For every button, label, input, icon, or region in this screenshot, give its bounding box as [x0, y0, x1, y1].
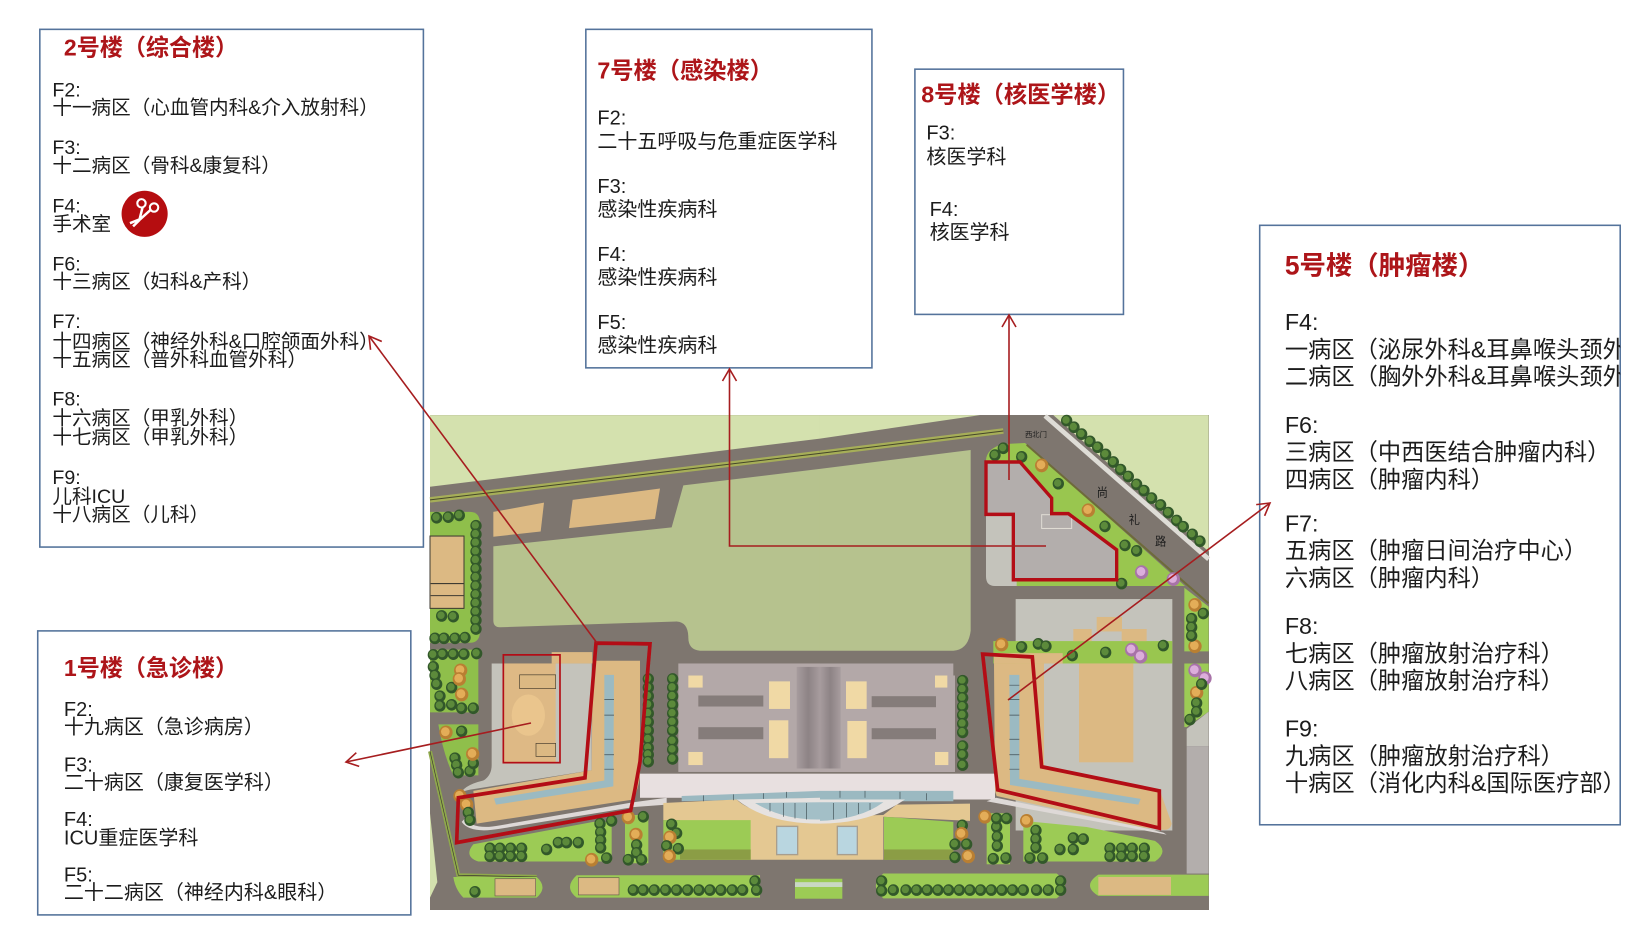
floor list: building 2: 十四病区（神经外科&口腔颌面外科）	[52, 331, 379, 353]
floor list: building 1: F2:	[64, 699, 93, 721]
heading: building 5: 5号楼（肿瘤楼）	[1285, 251, 1484, 281]
heading: building 2: 2号楼（综合楼）	[64, 35, 238, 61]
heading: building 1: 1号楼（急诊楼）	[64, 655, 238, 681]
floor list: building 2: F6:	[52, 253, 81, 275]
floor list: building 7: 感染性疾病科	[597, 198, 717, 221]
panel: building 2	[40, 29, 423, 547]
floor list: building 8: 核医学科	[926, 145, 1006, 168]
floor list: building 8	[926, 122, 1010, 244]
floor list: building 5: F6:	[1285, 412, 1318, 438]
floor list: building 1: F4:	[64, 809, 93, 831]
floor list: building 2: F8:	[52, 389, 81, 411]
floor list: building 2: 十八病区（儿科）	[52, 504, 209, 526]
road labels	[1025, 430, 1167, 549]
floor list: building 8: F3:	[926, 122, 955, 144]
arrow: to building 1	[346, 723, 531, 762]
floor list: building 2: 手术室	[52, 214, 111, 236]
road labels: 尚	[1097, 485, 1108, 499]
outline: building 2	[457, 643, 650, 843]
floor list: building 7: F2:	[597, 108, 626, 130]
floor list: building 1: 二十病区（康复医学科）	[64, 771, 284, 794]
floor list: building 2: F7:	[52, 311, 81, 333]
road labels: 礼	[1129, 513, 1140, 527]
floor list: building 8: 核医学科	[930, 221, 1010, 244]
floor list: building 7: 二十五呼吸与危重症医学科	[597, 130, 837, 153]
floor list: building 1: F5:	[64, 864, 93, 886]
heading: building 8: 8号楼（核医学楼）	[921, 82, 1120, 108]
floor list: building 5: F7:	[1285, 510, 1318, 536]
floor list: building 5: 五病区（肿瘤日间治疗中心）	[1285, 538, 1587, 564]
outline: building 5	[983, 654, 1159, 828]
panel: building 5	[1260, 225, 1643, 825]
floor list: building 1: 十九病区（急诊病房）	[64, 716, 264, 739]
floor list: building 2: 十三病区（妇科&产科）	[52, 271, 261, 293]
arrow: to building 5	[1008, 503, 1270, 700]
map: road base	[430, 415, 1209, 910]
site map	[428, 415, 1212, 910]
floor list: building 2: F3:	[52, 137, 81, 159]
panel: building 7	[586, 29, 872, 368]
floor list: building 7: F4:	[597, 244, 626, 266]
arrow: to building 8	[1008, 315, 1010, 480]
outline: building 1	[503, 655, 560, 763]
floor list: building 7: F5:	[597, 312, 626, 334]
floor list: building 2: 十六病区（甲乳外科）	[52, 407, 248, 429]
heading: building 7: 7号楼（感染楼）	[597, 58, 773, 84]
map: east half	[820, 415, 1212, 899]
floor list: building 7: 感染性疾病科	[597, 334, 717, 357]
floor list: building 5: 七病区（肿瘤放射治疗科）	[1285, 640, 1564, 666]
floor list: building 8: F4:	[930, 199, 958, 221]
road labels: 西北门	[1025, 430, 1047, 439]
floor list: building 2: 十一病区（心血管内科&介入放射科）	[52, 97, 379, 119]
floor list: building 2: F4:	[52, 196, 81, 218]
floor list: building 5: 四病区（肿瘤内科）	[1285, 466, 1494, 492]
floor list: building 2: F9:	[52, 467, 81, 489]
floor list: building 1	[64, 699, 337, 904]
arrow: to building 7	[730, 369, 1046, 546]
map: west half	[428, 415, 820, 899]
arrow: to building 2	[369, 336, 597, 643]
floor list: building 1: 二十二病区（神经内科&眼科）	[64, 881, 337, 904]
floor list: building 2: 十二病区（骨科&康复科）	[52, 155, 281, 177]
road labels: 路	[1155, 535, 1167, 549]
floor list: building 2	[52, 79, 379, 526]
floor list: building 2: 十五病区（普外科血管外科）	[52, 349, 307, 371]
floor list: building 1: F3:	[64, 754, 93, 776]
map: east trees	[876, 415, 1212, 897]
floor list: building 5: F4:	[1285, 309, 1318, 335]
floor list: building 5: F8:	[1285, 613, 1318, 639]
floor list: building 5: 十病区（消化内科&国际医疗部）	[1285, 770, 1626, 796]
floor list: building 7: 感染性疾病科	[597, 266, 717, 289]
floor list: building 5: 九病区（肿瘤放射治疗科）	[1285, 743, 1564, 769]
icon: surgery scissors	[122, 191, 168, 237]
map: west trees	[428, 510, 762, 898]
panel: building 1	[38, 631, 411, 915]
floor list: building 7: F3:	[597, 176, 626, 198]
floor list: building 2: 儿科ICU	[52, 486, 125, 508]
floor list: building 7	[597, 108, 837, 357]
panel: building 8	[915, 69, 1123, 314]
floor list: building 1: ICU重症医学科	[64, 827, 198, 850]
floor list: building 5	[1285, 309, 1643, 796]
floor list: building 2: 十七病区（甲乳外科）	[52, 426, 248, 448]
floor list: building 5: 八病区（肿瘤放射治疗科）	[1285, 668, 1564, 694]
floor list: building 2: F2:	[52, 79, 81, 101]
floor list: building 5: F9:	[1285, 716, 1318, 742]
outline: building 8	[986, 462, 1117, 580]
floor list: building 5: 六病区（肿瘤内科）	[1285, 565, 1494, 591]
floor list: building 5: 三病区（中西医结合肿瘤内科）	[1285, 439, 1610, 465]
